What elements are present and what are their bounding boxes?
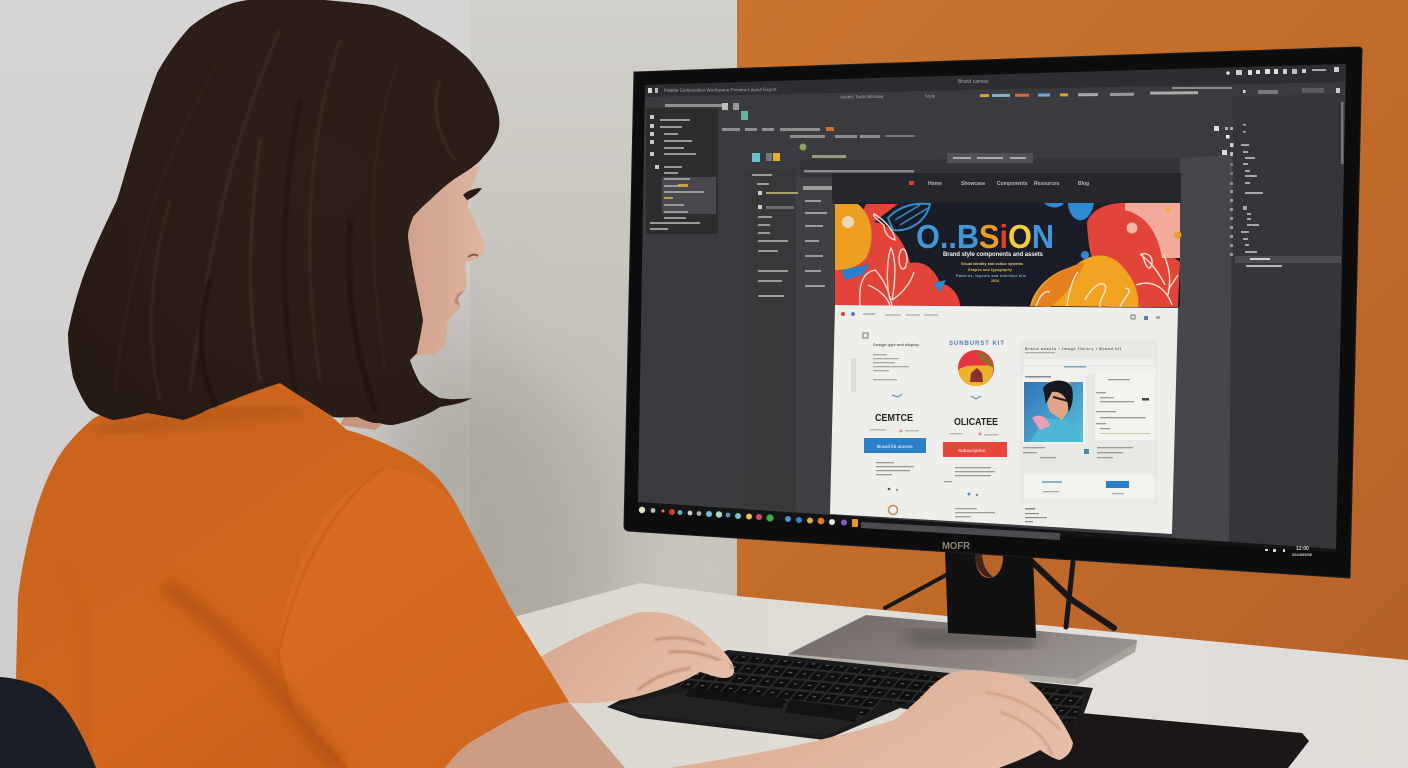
column: middle card: SUNBURST KIT: [949, 341, 1004, 347]
column: right card: Brand assets / Image library / Brand kit: [1025, 347, 1122, 351]
monitor screen: [638, 64, 1346, 549]
column: middle card: Subscription: [958, 448, 986, 453]
banner red shape left: [835, 204, 960, 306]
person: orange t-shirt: [16, 380, 569, 768]
action card: [1024, 475, 1154, 499]
title bar: [645, 64, 1346, 97]
canvas header bar: Home: [928, 181, 942, 187]
eye: [463, 188, 482, 200]
right panel tree: [1172, 87, 1344, 267]
system tray: [1265, 546, 1313, 557]
banner: [835, 203, 1182, 307]
monitor bezel: [624, 47, 1362, 578]
menu bar: [648, 83, 1198, 101]
banner: Visual identity and colour systems: [961, 262, 1023, 266]
system tray: 2024/05/06: [1292, 552, 1313, 557]
column: right card: [1020, 340, 1158, 504]
banner right shapes: [1087, 203, 1180, 307]
canvas header bar: [832, 173, 1181, 203]
canvas header bar: Components: [997, 181, 1028, 187]
person: face: [340, 166, 485, 430]
system tray: 12:00: [1296, 546, 1309, 552]
circular badge: [958, 350, 994, 386]
banner title: O..BSiON: [916, 218, 1054, 255]
nostril and lips: [468, 255, 478, 257]
banner: Patterns, layouts and interface kits: [956, 274, 1026, 278]
tool icons: [752, 144, 1033, 172]
mouse pad: [995, 712, 1309, 768]
hand: left hand on keyboard: [538, 612, 734, 703]
forearm and hand: right hand on mouse: [669, 670, 1073, 768]
banner leaf outlines: [860, 214, 914, 306]
monitor stand base: [788, 615, 1137, 685]
column: left card: Design type and display: [873, 342, 920, 347]
heading: left column: CEMTCE: [875, 413, 913, 424]
orange wall: [737, 0, 1408, 700]
taskbar: [638, 502, 1336, 557]
banner yellow shape: [835, 204, 872, 270]
banner: 2024: [991, 279, 999, 283]
heading: middle column: OLICATEE: [954, 417, 998, 428]
person: hair: [68, 0, 499, 425]
workspace dark columns: [743, 94, 1344, 549]
menu bar: Palette Composition Workspace Preview Layout Export: [664, 87, 777, 93]
forearm: rear arm: [445, 702, 625, 768]
photo panel: [1022, 373, 1086, 444]
button: small blue: [1106, 481, 1129, 488]
canvas header bar: Showcase: [961, 181, 986, 187]
column: left card: Brand kit access: [877, 444, 913, 449]
banner blue shapes: [841, 203, 1094, 292]
button: blue: [864, 438, 926, 453]
web page: [830, 305, 1178, 534]
button: red: [943, 442, 1007, 457]
title bar: Brand canvas: [958, 79, 989, 85]
chair: [0, 677, 96, 768]
photo: [1024, 380, 1083, 442]
menu bar: Style: [925, 94, 936, 99]
left floating panel: [646, 108, 718, 234]
sleeve seam and folds: [278, 468, 384, 768]
keyboard: [607, 650, 1093, 740]
cables behind the monitor: [885, 558, 1114, 628]
tool row: [665, 103, 915, 138]
canvas header bar: Blog: [1078, 181, 1089, 187]
monitor stand neck: [945, 550, 1036, 638]
desk: [514, 583, 1408, 768]
hair strands: [115, 30, 455, 410]
column: middle card: [943, 341, 1007, 517]
menu bar: Assets Tools Window: [840, 94, 884, 99]
wall: [0, 0, 770, 768]
monitor logo: MOFR: [942, 541, 971, 552]
column: left card: [851, 333, 926, 514]
side panel: [1095, 373, 1154, 440]
canvas header bar: Resources: [1034, 181, 1060, 187]
banner: Shapes and typography: [968, 268, 1012, 272]
monitor: [624, 47, 1362, 578]
banner subtitle: Brand style components and assets: [943, 252, 1044, 258]
layers tree: [752, 174, 833, 297]
dock icons: [639, 507, 858, 527]
sleeve panel: [278, 468, 569, 768]
